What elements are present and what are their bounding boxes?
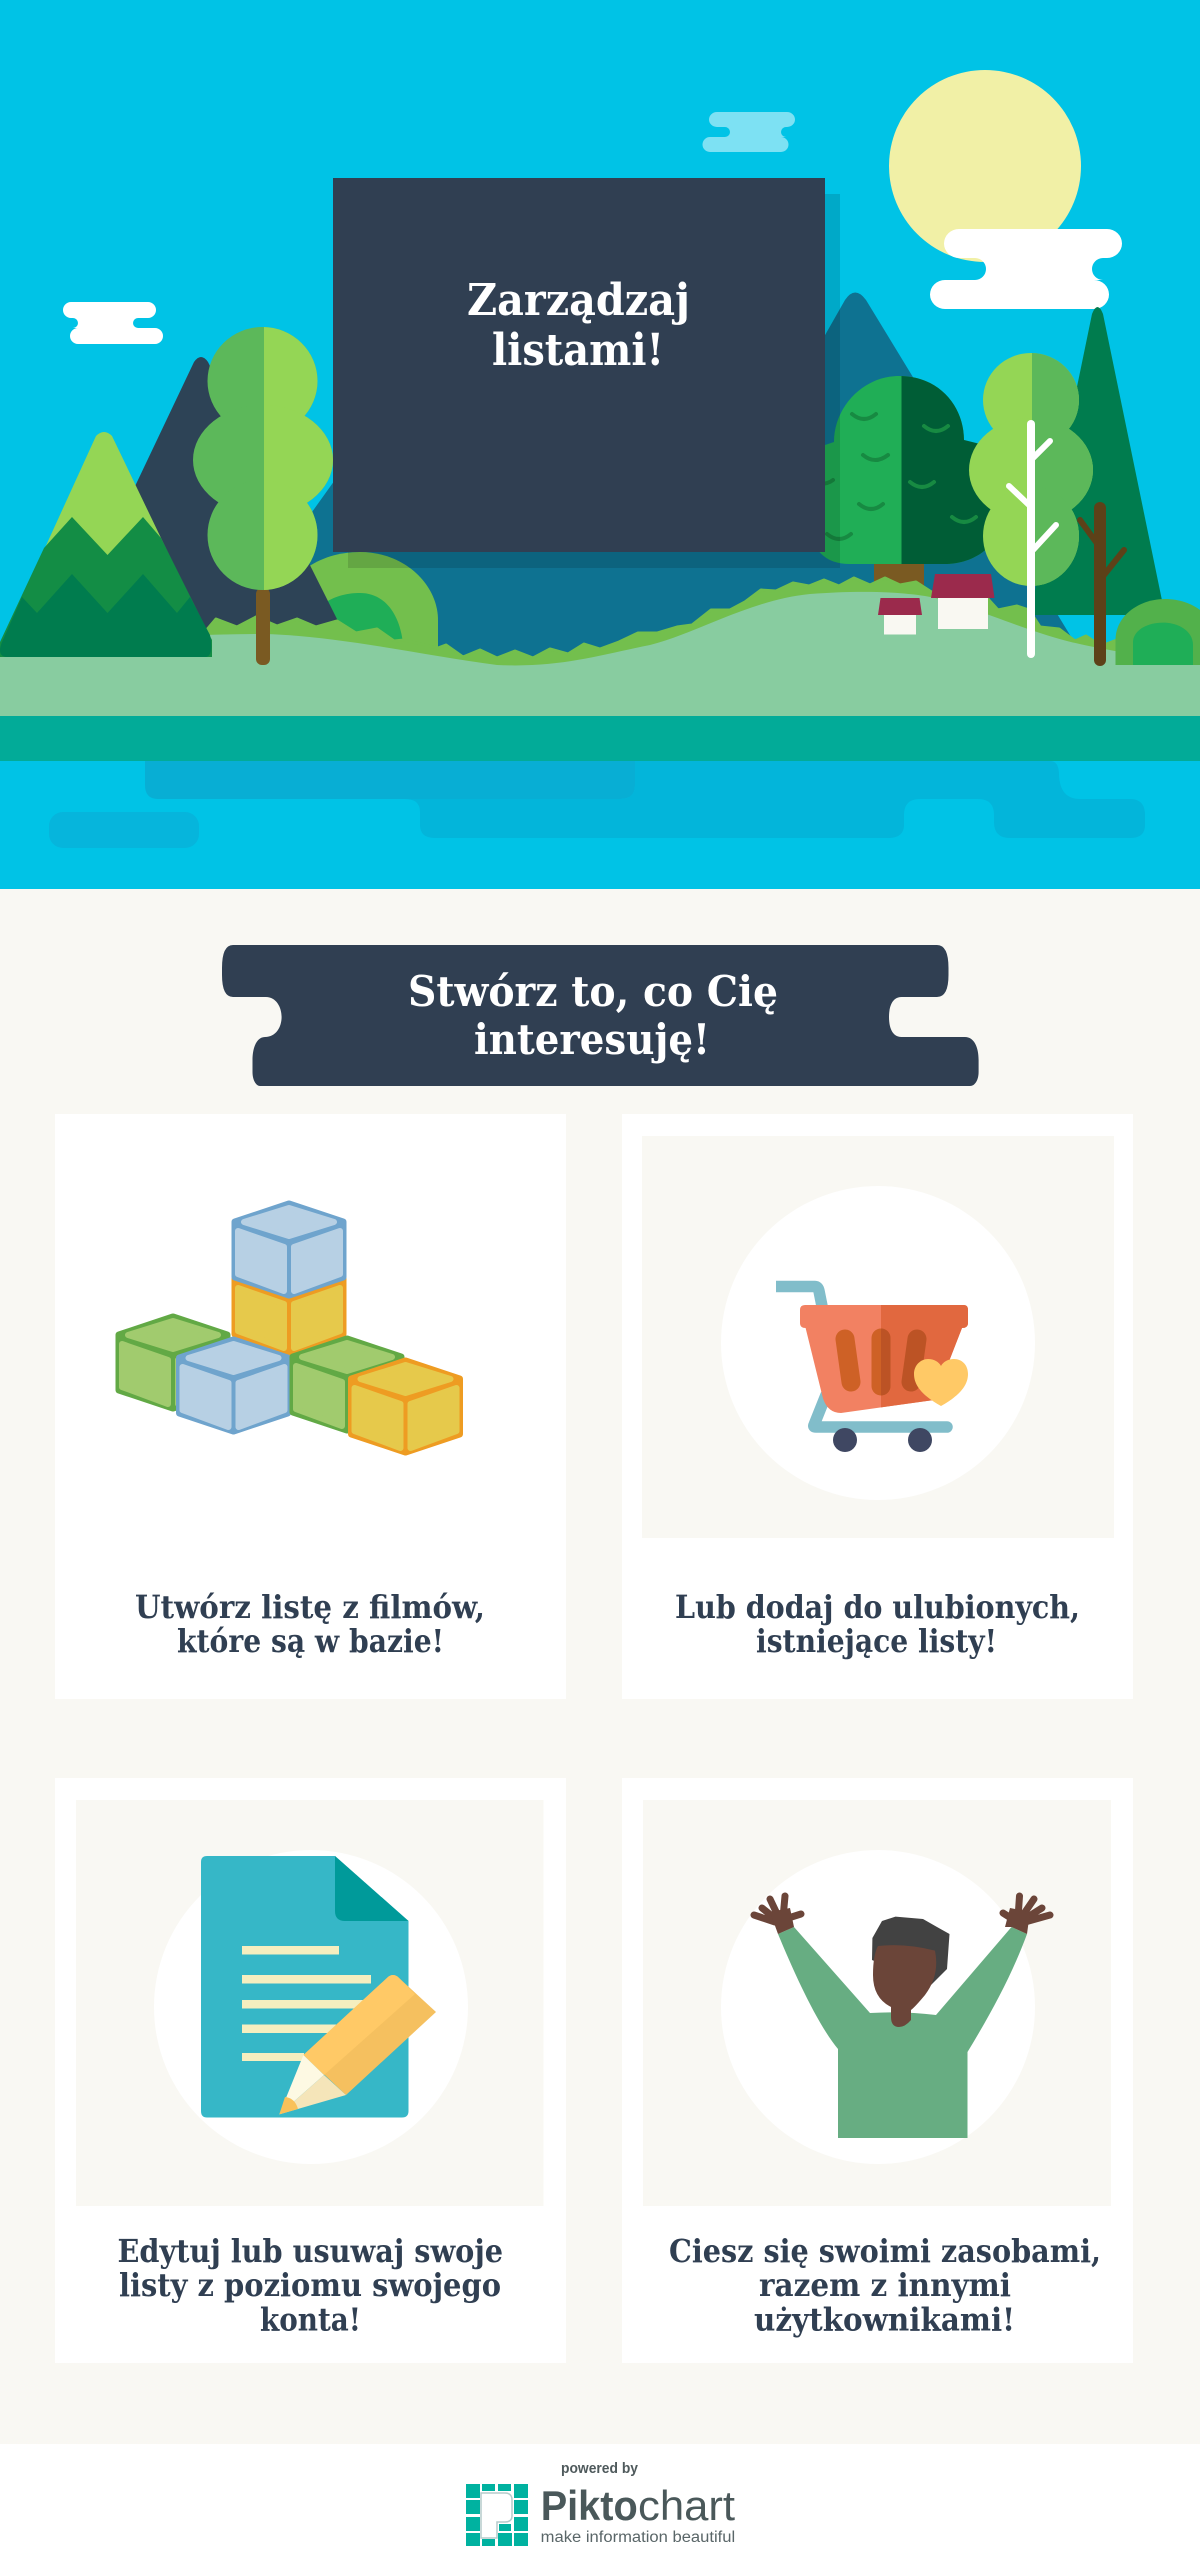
footer bbox=[0, 2444, 1200, 2564]
icon circle bbox=[721, 1850, 1035, 2164]
ground hill bbox=[0, 592, 1200, 716]
cloud: small white bbox=[63, 302, 163, 344]
dark green tree bbox=[820, 376, 990, 586]
title panel bbox=[333, 178, 825, 552]
banner heading bbox=[222, 945, 979, 1086]
icon background bbox=[642, 1136, 1114, 1538]
hero illustration panel bbox=[0, 0, 1200, 889]
caption: Edytuj lub usuwaj swoje bbox=[118, 2232, 503, 2270]
water reflections bbox=[49, 761, 1145, 848]
white bare tree bbox=[1009, 424, 1056, 654]
logo wordmark: Pikto bbox=[541, 2482, 638, 2529]
caption: użytkownikami! bbox=[754, 2300, 1015, 2338]
caption: Ciesz się swoimi zasobami, bbox=[669, 2232, 1101, 2270]
caption: Utwórz listę z filmów, bbox=[135, 1588, 485, 1626]
caption: konta! bbox=[260, 2300, 361, 2338]
cloud: pale bbox=[703, 112, 795, 152]
logo mark bbox=[466, 2484, 528, 2546]
small house bbox=[878, 598, 922, 634]
icon: document and pencil bbox=[201, 1856, 436, 2118]
bush behind dark mountain bbox=[280, 552, 438, 660]
cloud: large white bbox=[930, 229, 1122, 309]
right bush bbox=[1116, 599, 1200, 665]
caption: razem z innymi bbox=[759, 2266, 1011, 2304]
caption: które są w bazie! bbox=[177, 1622, 444, 1660]
sky bbox=[0, 0, 1200, 889]
card: edit bbox=[55, 1778, 566, 2363]
card: favourites bbox=[622, 1114, 1133, 1699]
footer: chart bbox=[638, 2482, 735, 2529]
large house bbox=[931, 574, 994, 629]
brown bare tree bbox=[1080, 508, 1124, 660]
wavy grass strip bbox=[205, 578, 1140, 680]
icon: shopping cart bbox=[776, 1286, 968, 1452]
title panel shadow bbox=[348, 194, 840, 568]
icon circle bbox=[721, 1186, 1035, 1500]
banner text: Stwórz to, co Cię bbox=[408, 967, 778, 1016]
dark mountain bbox=[100, 357, 340, 660]
caption: listy z poziomu swojego bbox=[119, 2266, 501, 2304]
green split tree bbox=[969, 353, 1093, 586]
banner text: interesuję! bbox=[474, 1015, 710, 1064]
card: enjoy bbox=[622, 1778, 1133, 2363]
conifer bbox=[1030, 307, 1165, 615]
caption: istniejące listy! bbox=[756, 1622, 997, 1660]
card: create list bbox=[55, 1114, 566, 1699]
icon: cheering person bbox=[754, 1896, 1050, 2138]
icon circle bbox=[154, 1850, 468, 2164]
title: Zarządzaj bbox=[467, 275, 690, 326]
lake band bbox=[0, 716, 1200, 761]
green mountain bbox=[0, 432, 212, 657]
caption: Lub dodaj do ulubionych, bbox=[675, 1588, 1080, 1626]
tagline: make information beautiful bbox=[541, 2529, 735, 2546]
icon background bbox=[76, 1800, 544, 2206]
blue mountains bbox=[300, 292, 1073, 670]
sun bbox=[889, 70, 1081, 262]
tree left bbox=[193, 327, 333, 665]
icon background bbox=[643, 1800, 1111, 2206]
icon: blocks bbox=[119, 1204, 460, 1452]
title: listami! bbox=[492, 325, 664, 376]
powered by: powered by bbox=[561, 2461, 638, 2477]
